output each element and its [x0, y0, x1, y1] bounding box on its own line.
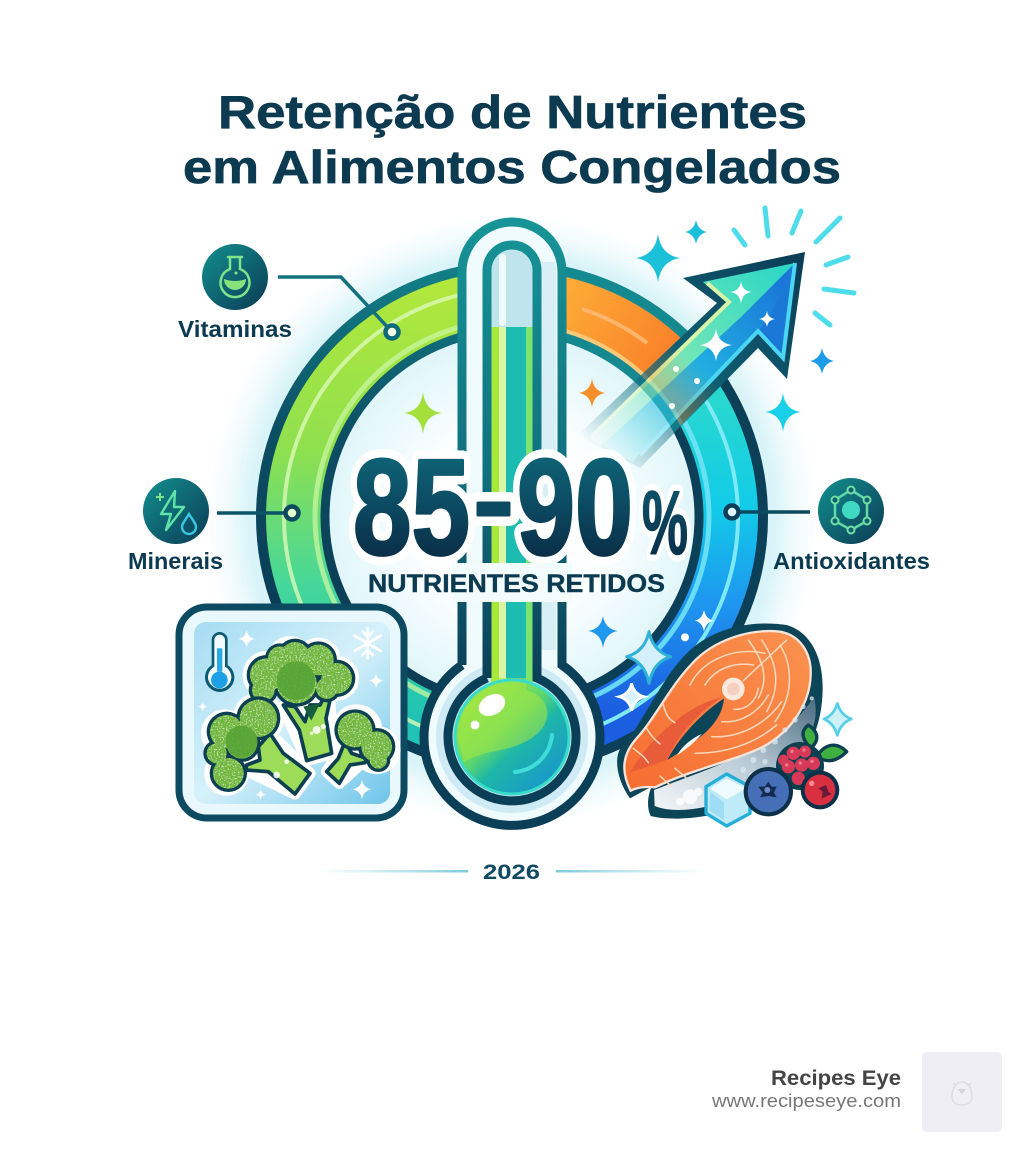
arrow fill [590, 263, 795, 462]
callout: antioxidantes [726, 478, 930, 574]
brand name: Recipes Eye [771, 1066, 901, 1090]
icon: flask [202, 244, 268, 310]
ring: orange segment [566, 266, 716, 432]
ring: green segment [256, 266, 458, 756]
burst rays [734, 208, 854, 325]
thermometer glass [424, 222, 600, 825]
connector [735, 510, 810, 514]
broccoli: top floret [247, 639, 355, 761]
icon: mini thermometer [205, 632, 234, 692]
sparkle outline [824, 703, 851, 735]
title [183, 86, 841, 193]
left line [318, 870, 468, 872]
footer brand [711, 1052, 1002, 1132]
big number [353, 431, 688, 583]
broccoli: right floret [327, 709, 395, 783]
ring gauge [261, 266, 763, 768]
panel sparkles [198, 630, 383, 800]
salmon body [617, 623, 823, 819]
salmon and berries [617, 610, 851, 826]
sparkles [404, 220, 834, 648]
panel frame [179, 607, 404, 818]
salmon dark flap [630, 697, 722, 773]
thermometer highlight [499, 254, 506, 326]
leaves [803, 725, 847, 761]
salmon fat lines [633, 640, 789, 787]
frost on skin [676, 788, 702, 806]
arrow outline [578, 252, 805, 468]
label: Vitaminas [178, 316, 292, 342]
node [726, 506, 738, 518]
red berry [801, 771, 839, 809]
brand url: www.recipeseye.com [711, 1090, 901, 1111]
icon: snowflake [355, 628, 381, 658]
ice cube [706, 774, 750, 826]
icon: molecule [818, 478, 884, 544]
salmon bone [722, 678, 745, 700]
broccoli: left floret [203, 696, 310, 794]
title: Retenção de Nutrientes [218, 86, 807, 138]
callout: minerais [128, 478, 298, 574]
logo placeholder [922, 1052, 1002, 1132]
title: em Alimentos Congelados [183, 141, 841, 193]
number digits: 90 [517, 431, 633, 583]
panel ice background [194, 622, 390, 804]
thermometer liquid [455, 327, 569, 794]
subtitle: NUTRIENTES RETIDOS [368, 570, 665, 598]
number halo: 90 [517, 431, 633, 583]
number digits: 85 [353, 431, 470, 583]
central glow [207, 215, 817, 825]
number digits: % [642, 474, 688, 574]
year: 2026 [483, 861, 540, 884]
label: Minerais [128, 548, 223, 574]
raspberry [776, 742, 824, 790]
salmon slit [667, 698, 724, 760]
thermometer [424, 222, 600, 825]
panel: frozen broccoli [179, 607, 404, 818]
number halo: 85 [353, 431, 470, 583]
ring: blue segment [587, 378, 768, 756]
salmon flesh [624, 631, 811, 791]
number digits [353, 431, 688, 583]
node [386, 326, 398, 338]
ring sparkles [619, 610, 714, 711]
blueberry [744, 767, 793, 816]
broccoli: halo [207, 642, 395, 794]
label: Antioxidantes [773, 548, 930, 574]
growth arrow [578, 252, 805, 468]
icon: lightning and drop [143, 478, 209, 544]
right line [556, 870, 706, 872]
salmon skin [654, 697, 816, 810]
node [286, 506, 298, 520]
arrow sparkles [669, 281, 775, 409]
connector [278, 277, 392, 332]
subtitle band [452, 563, 572, 602]
thermometer outlines [424, 222, 600, 825]
number halo [353, 431, 688, 583]
number halo: % [642, 474, 688, 574]
connector [217, 511, 290, 515]
frost specks [270, 724, 326, 782]
callout: vitaminas [178, 244, 398, 342]
